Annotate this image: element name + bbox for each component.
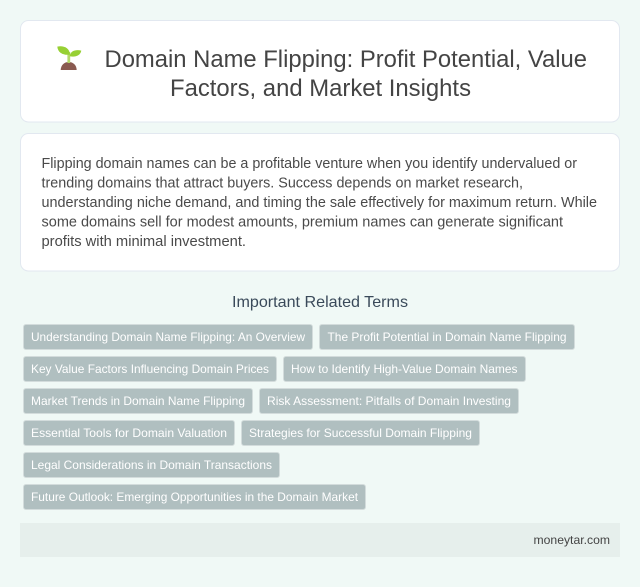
tag: strategies — [242, 420, 480, 446]
icon: seedling — [57, 46, 81, 70]
tag: key value factors: Key Value Factors Influencing Domain Prices — [31, 362, 269, 376]
tag: future outlook — [24, 484, 366, 510]
tag: high-value names: How to Identify High-Value Domain Names — [291, 362, 518, 376]
tag: market trends: Market Trends in Domain Name Flipping — [31, 394, 245, 408]
tag: profit potential — [320, 324, 574, 350]
title: Domain Name Flipping: Profit Potential, Value — [104, 46, 587, 73]
tag: market trends — [24, 388, 252, 414]
title: Factors, and Market Insights — [170, 75, 471, 102]
text block: intro paragraph — [42, 156, 597, 250]
footer bar — [20, 523, 620, 557]
tag: future outlook: Future Outlook: Emerging Opportunities in the Domain Market — [31, 490, 359, 504]
tag: key value factors — [24, 356, 276, 382]
panel: title card — [20, 20, 620, 122]
text block: intro paragraph: profits with minimal investment. — [42, 234, 246, 250]
tag: essential tools: Essential Tools for Domain Valuation — [31, 426, 227, 440]
heading: important related terms: Important Related Terms — [232, 294, 408, 311]
text block: intro paragraph: Flipping domain names can be a profitable venture when you identify undervalued or — [42, 156, 577, 172]
tag: essential tools — [24, 420, 234, 446]
tag: risk assessment: Risk Assessment: Pitfalls of Domain Investing — [267, 394, 511, 408]
text block: intro paragraph: trending domains that attract buyers. Success depends on market research, — [42, 176, 523, 192]
tag list — [24, 324, 574, 510]
tag: strategies: Strategies for Successful Domain Flipping — [249, 426, 472, 440]
text block: intro paragraph: understanding niche demand, and timing the sale effectively for maximum return. While — [42, 195, 597, 211]
tag: understanding — [24, 324, 312, 350]
tag: profit potential: The Profit Potential in Domain Name Flipping — [328, 330, 566, 344]
tag: understanding: Understanding Domain Name Flipping: An Overview — [31, 330, 305, 344]
title — [104, 46, 587, 102]
tag: legal considerations: Legal Considerations in Domain Transactions — [31, 458, 272, 472]
text block: intro paragraph: some domains sell for modest amounts, premium names can generate significant — [42, 214, 563, 230]
panel: intro paragraph card — [20, 134, 620, 271]
footer source text: moneytar.com — [534, 533, 610, 547]
tag: risk assessment — [260, 388, 518, 414]
tag: high-value names — [284, 356, 526, 382]
tag: legal considerations — [24, 452, 280, 478]
